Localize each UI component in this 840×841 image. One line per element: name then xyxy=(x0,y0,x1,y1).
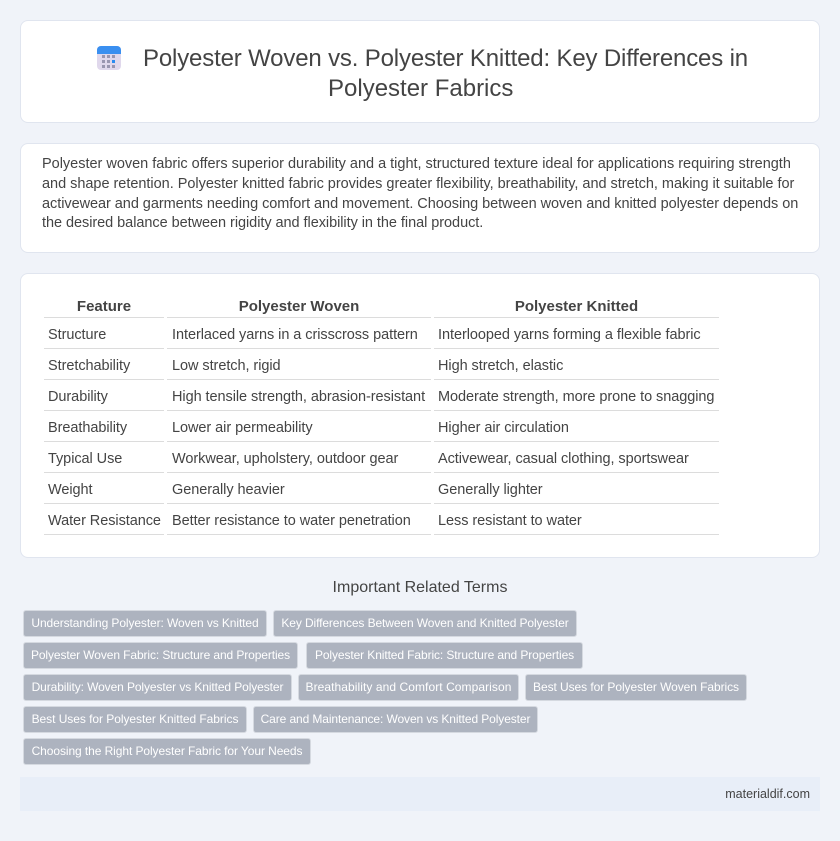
tag xyxy=(525,674,747,701)
table: Interlaced yarns in a crisscross pattern xyxy=(172,327,418,343)
tag xyxy=(306,642,583,669)
summary text xyxy=(42,156,798,231)
tag xyxy=(23,738,311,765)
tag: Breathability and Comfort Comparison xyxy=(306,680,511,694)
row: Weight: Weight xyxy=(48,482,93,498)
table: Workwear, upholstery, outdoor gear xyxy=(172,451,398,467)
tag xyxy=(253,706,538,733)
row: Structure: Structure xyxy=(48,327,106,343)
panel: header xyxy=(20,20,820,123)
tag xyxy=(23,642,298,669)
table: Better resistance to water penetration xyxy=(172,513,411,529)
row: Typical Use: Typical Use xyxy=(48,451,122,467)
table: Generally lighter xyxy=(438,482,543,498)
tag: Polyester Knitted Fabric: Structure and Properties xyxy=(315,648,574,662)
table: High tensile strength, abrasion-resistant xyxy=(172,389,425,405)
heading: related terms: Important Related Terms xyxy=(333,579,507,596)
table: Interlooped yarns forming a flexible fabric xyxy=(438,327,701,343)
table: High stretch, elastic xyxy=(438,358,563,374)
header: Feature: Feature xyxy=(77,298,131,315)
tag xyxy=(298,674,519,701)
table: Less resistant to water xyxy=(438,513,582,529)
table xyxy=(44,298,719,535)
table: Moderate strength, more prone to snagging xyxy=(438,389,714,405)
tag: Best Uses for Polyester Knitted Fabrics xyxy=(32,712,238,726)
tag: Understanding Polyester: Woven vs Knitted xyxy=(31,616,259,630)
row: Breathability: Breathability xyxy=(48,420,127,436)
related term tags xyxy=(23,610,747,765)
tag: Care and Maintenance: Woven vs Knitted Polyester xyxy=(261,712,530,726)
title: Polyester Fabrics xyxy=(328,75,513,102)
footer source: materialdif.com xyxy=(725,787,810,801)
summary text: Polyester woven fabric offers superior durability and a tight, structured texture ideal for applications requiring strength xyxy=(42,156,791,172)
title xyxy=(143,45,748,102)
header: Polyester Woven: Polyester Woven xyxy=(239,298,359,315)
tag: Durability: Woven Polyester vs Knitted Polyester xyxy=(32,680,283,694)
tag xyxy=(273,610,577,637)
summary text: and shape retention. Polyester knitted fabric provides greater flexibility, breathability, and stretch, making it suitable for xyxy=(42,176,794,192)
tag xyxy=(23,706,247,733)
summary text: the desired balance between rigidity and flexibility in the final product. xyxy=(42,215,483,231)
table: Generally heavier xyxy=(172,482,285,498)
tag: Choosing the Right Polyester Fabric for Your Needs xyxy=(32,744,302,758)
tag xyxy=(23,610,267,637)
header: Polyester Knitted: Polyester Knitted xyxy=(515,298,638,315)
table: Low stretch, rigid xyxy=(172,358,281,374)
tag: Polyester Woven Fabric: Structure and Properties xyxy=(31,648,290,662)
table: Higher air circulation xyxy=(438,420,569,436)
title: Polyester Woven vs. Polyester Knitted: Key Differences in xyxy=(143,45,748,72)
tag xyxy=(23,674,292,701)
table: Activewear, casual clothing, sportswear xyxy=(438,451,689,467)
tag: Key Differences Between Woven and Knitted Polyester xyxy=(281,616,569,630)
row: Stretchability: Stretchability xyxy=(48,358,130,374)
tag: Best Uses for Polyester Woven Fabrics xyxy=(533,680,739,694)
icon: calendar grid xyxy=(97,46,121,70)
panel: comparison table xyxy=(20,273,820,558)
row: Durability: Durability xyxy=(48,389,108,405)
row: Water Resistance: Water Resistance xyxy=(48,513,161,529)
table: Lower air permeability xyxy=(172,420,313,436)
panel: summary xyxy=(20,143,820,253)
summary text: activewear and garments needing comfort and movement. Choosing between woven and knitted polyester depends on xyxy=(42,196,798,212)
footer bar xyxy=(20,777,820,811)
